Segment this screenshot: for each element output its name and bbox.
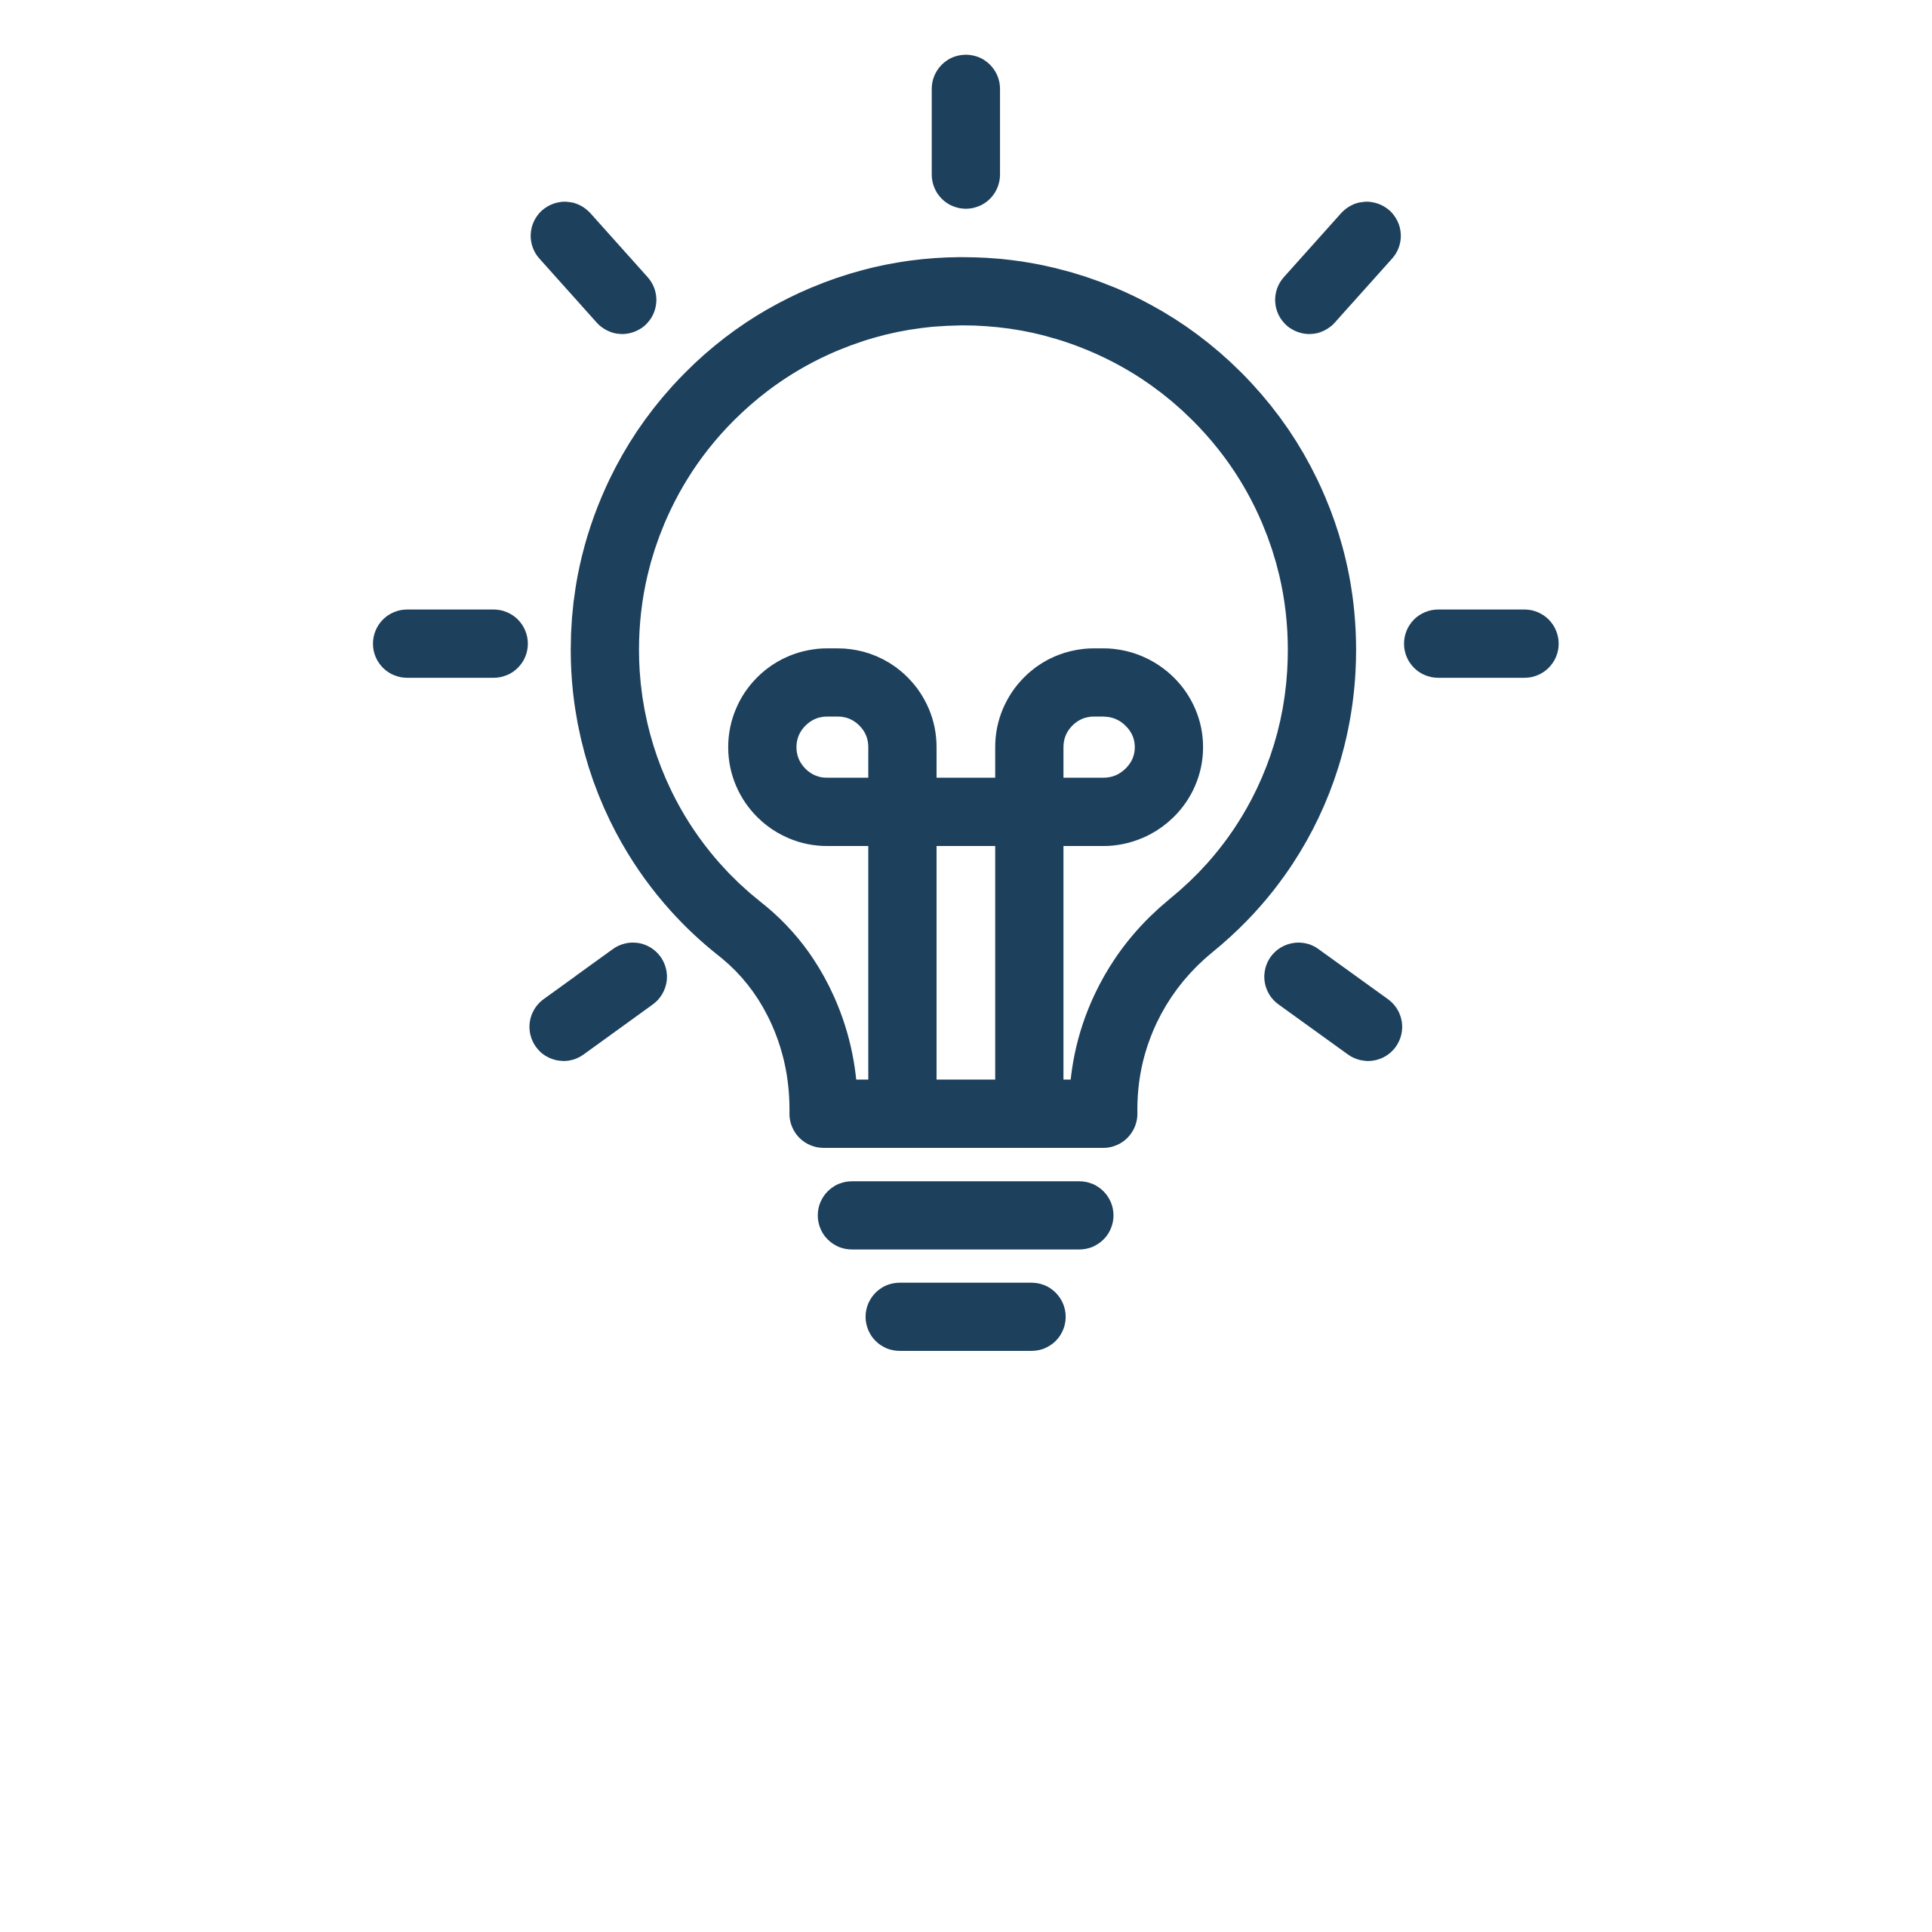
- filament: [762, 682, 1169, 1113]
- ray: lower right: [1298, 977, 1368, 1027]
- ray: left: [407, 623, 494, 665]
- ray: right: [1438, 623, 1524, 665]
- bulb glass outline: [605, 291, 1322, 1114]
- screw base: upper bar: [852, 1195, 1079, 1236]
- screw base: lower bar: [900, 1296, 1032, 1338]
- rays around the bulb: [407, 89, 1524, 1027]
- ray: top: [945, 89, 987, 174]
- ray: upper right: [1309, 235, 1367, 300]
- ray: upper left: [565, 235, 622, 300]
- ray: lower left: [564, 977, 633, 1027]
